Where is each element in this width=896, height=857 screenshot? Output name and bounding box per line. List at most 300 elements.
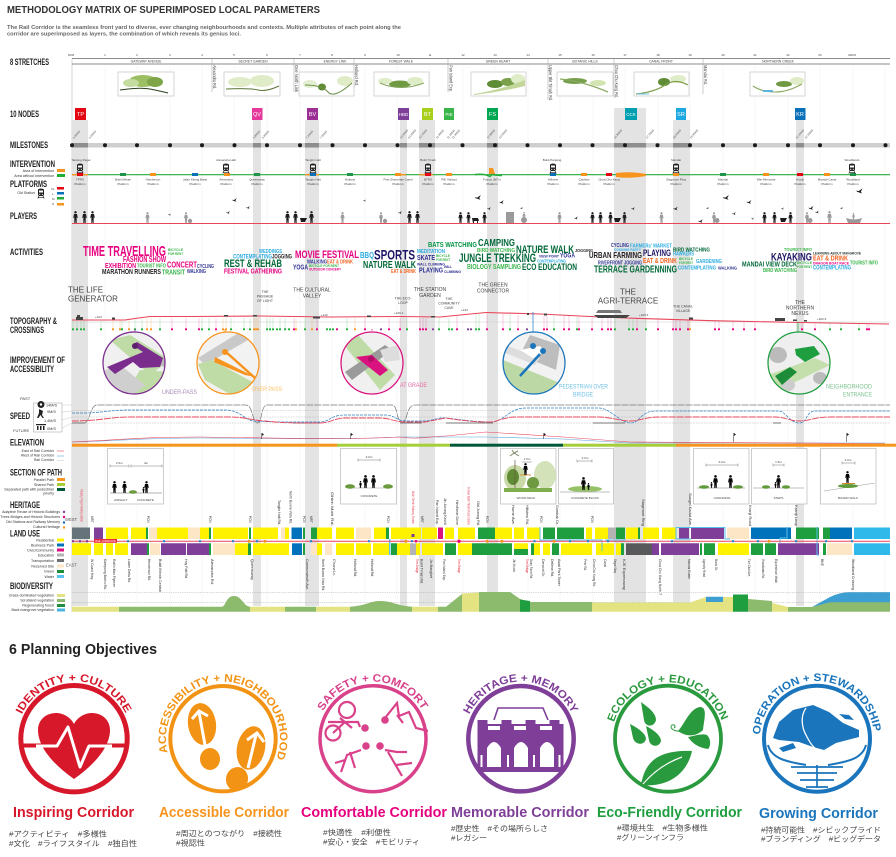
land use legend: Green — [44, 570, 54, 574]
objective: accessible corridor — [158, 674, 289, 848]
platform names: Platform — [794, 182, 806, 186]
place names: GARDEN — [419, 293, 441, 299]
road dividers — [212, 65, 708, 101]
words: canal front: EAT & DRINK — [643, 256, 677, 265]
upper road labels: MRT — [309, 516, 313, 523]
platform names: Platform — [443, 182, 455, 186]
upper road labels: Kranji Loop — [794, 505, 798, 526]
place names: NORTHERN — [786, 306, 815, 312]
node markers: SR — [677, 112, 685, 118]
station names — [71, 158, 860, 162]
tags: #周辺とのつながり #接続性 — [176, 828, 283, 838]
elevation legend: Rail Corridor — [34, 458, 55, 462]
upper road labels: Jln Jurong Kechil — [443, 498, 447, 525]
heading: topography and crossings: TOPOGRAPHY & — [10, 316, 57, 326]
kilometre scale: 17 — [623, 53, 627, 57]
badge: identity and culture — [16, 674, 132, 794]
node markers: BV — [309, 112, 316, 118]
milestone distance labels — [72, 128, 814, 140]
words: green heart: CONTEMPLATING — [537, 258, 566, 263]
stretch names: GREEN HEART — [486, 60, 510, 64]
stretch names: NORTHERN CREEK — [762, 60, 795, 64]
words: forest walk: WALL CLIMBING — [417, 261, 445, 266]
crossing stems — [73, 314, 859, 329]
upper road labels: PCN — [590, 516, 594, 523]
kilometre scale: 11 — [428, 53, 432, 57]
words: gateway avenue: EXHIBITION — [105, 263, 136, 270]
kilometre scale: 23 — [818, 53, 822, 57]
platform names: Platform — [422, 182, 434, 186]
section: steps — [752, 448, 807, 504]
row: land use — [10, 517, 890, 595]
words: energy link: BBQ — [360, 251, 374, 260]
circle: neighbourhood entrance — [768, 332, 830, 394]
station names: Bukit Panjang — [543, 158, 562, 162]
stretch names: ENERGY LINK — [324, 60, 347, 64]
stretch names: FOREST WALK — [389, 60, 414, 64]
platform names: Queensway — [249, 178, 265, 182]
lower road labels: Segar Way — [613, 559, 617, 573]
milestone distance labels: 10.00KM — [399, 128, 409, 140]
lower road labels: Dellene Rd. — [550, 559, 554, 577]
words: energy link: BICYCLE FOR RENT — [309, 264, 340, 268]
section legend: priority — [43, 492, 54, 496]
platform markers — [77, 173, 856, 176]
place names: PASSAGE — [257, 294, 274, 298]
elevation tags: +110 — [321, 313, 328, 317]
words: green heart: BIRD WATCHING — [477, 248, 515, 254]
platform names: Platform — [344, 182, 356, 186]
kilometre scale: 4 — [201, 53, 203, 57]
circle: over-pass — [197, 332, 262, 400]
platform names: Cashew — [579, 178, 590, 182]
land use legend: Transportation — [31, 559, 54, 563]
platform names: Platform — [251, 182, 263, 186]
kilometre scale: 13 — [493, 53, 497, 57]
label: neighbourhood entrance: ENTRANCE — [843, 392, 872, 398]
platforms legend: S — [52, 202, 54, 206]
kilometre scale: 24KM — [848, 53, 856, 57]
milestone distance labels: 0.00KM — [72, 129, 81, 140]
elevation tags: +126.1 — [394, 311, 404, 315]
land use legend: Residential — [36, 538, 54, 542]
section: steps: STEPS — [774, 496, 783, 500]
words: canal front: FARMERs' MARKET — [630, 244, 672, 250]
elevation legend: East of Rail Corridor — [22, 449, 55, 453]
ground line — [72, 222, 890, 224]
milestone band — [72, 143, 890, 148]
objective: comfortable corridor — [301, 674, 447, 846]
road dividers: Mandai Rd. — [703, 65, 708, 85]
label: neighbourhood entrance: NEIGHBORHOOD — [826, 384, 873, 390]
tags: #レガシー — [451, 832, 487, 842]
lower road labels: Canal — [603, 559, 607, 567]
tags: #持続可能性 #シビックプライド — [761, 824, 881, 834]
words: canal front: FOR RENT — [679, 261, 694, 265]
place names: VILLAGE — [676, 309, 691, 313]
lower road labels: Pan Island Exp. — [442, 559, 446, 581]
row: activities word cloud — [10, 238, 878, 276]
objective: memorable corridor — [451, 674, 589, 842]
lower road labels: Tres Bridge — [415, 559, 419, 573]
platform names: Platform — [74, 182, 86, 186]
label: neighbourhood entrance — [826, 384, 873, 398]
direction labels: EAST — [66, 562, 77, 568]
words: green heart: NATURE WALK — [516, 244, 574, 256]
circle: under-pass — [102, 331, 166, 395]
place names: THE ECO- — [395, 296, 412, 300]
road dividers: Alexandra Rd. — [212, 65, 217, 89]
stretch names — [131, 60, 795, 64]
name: comfortable corridor: Comfortable Corridor — [301, 805, 447, 821]
lower road labels: Tres Bridge — [525, 559, 529, 573]
name: growing corridor: Growing Corridor — [759, 806, 878, 822]
speed scale box: 9M/S — [47, 410, 56, 414]
words: gateway avenue: WALKING — [187, 269, 206, 275]
badge: heritage and memory — [463, 674, 579, 794]
lower road labels: Lower Delta Rd. — [127, 559, 131, 583]
badge: operation and stewardship: OPERATION + STEWARDSHIP — [752, 673, 881, 734]
place names: THE STATION — [414, 287, 447, 293]
milestone distance labels: 7.60KM — [319, 129, 328, 140]
lower road labels: Mandai Estate — [687, 559, 691, 579]
place names: NEXUS — [791, 311, 809, 317]
circle: at grade — [341, 332, 403, 394]
badge: heritage and memory: HERITAGE + MEMORY — [463, 674, 579, 714]
platform names: Holland — [345, 178, 355, 182]
upper road labels: PCN — [248, 516, 252, 523]
words: northern creek: TOURIST INFO — [850, 260, 878, 266]
section: steps: 1.5m — [775, 460, 782, 464]
upper road labels: Hindhede Drive — [455, 500, 459, 525]
section: asphalt and concrete — [108, 448, 164, 504]
milestone distance labels: 10.20KM — [407, 128, 417, 140]
intro text — [7, 25, 401, 38]
badge: ecology and education — [607, 674, 728, 794]
land use legend: Education — [38, 554, 54, 558]
tags: #ブランディング #ビッグデータ — [761, 834, 881, 844]
place names: COMMUNITY — [438, 302, 460, 306]
elevation lines — [72, 437, 885, 443]
biodiversity legend — [9, 594, 65, 612]
land use legend: Reserved Site — [31, 564, 54, 568]
words: gateway avenue: CYCLING — [197, 264, 214, 270]
words: northern creek: MANDAI VIEW DECK — [742, 260, 797, 269]
intervention legend — [14, 169, 65, 178]
birds — [168, 188, 863, 223]
lower road labels: Commonwealth Ave. — [305, 559, 309, 590]
speed line: past — [84, 405, 890, 423]
words: northern creek: LEARNING ABOUT MANGROVE — [813, 251, 862, 255]
upper road labels: PCN — [539, 516, 543, 523]
milestone distance labels: 10.70KM — [418, 128, 428, 140]
row: intervention and platforms — [10, 158, 890, 206]
words: energy link: YOGA — [293, 262, 308, 272]
heading: section of path: SECTION OF PATH — [10, 468, 62, 478]
upper road labels: Former Bukit Timah Road Station — [466, 487, 470, 525]
tags — [323, 827, 420, 846]
platform names: Platform — [147, 182, 159, 186]
tags — [617, 822, 709, 842]
lower road labels — [90, 559, 855, 595]
platform names: Choa Chu Kang — [598, 178, 620, 182]
place names: OF LIGHT — [257, 299, 274, 303]
speed scale box: 14M/S — [46, 404, 57, 408]
words: gateway avenue: CONCERT — [167, 260, 198, 270]
row: heritage — [0, 487, 798, 529]
section: concrete 3.0m: CONCRETE — [361, 494, 377, 498]
words: green heart: JOGGING — [575, 248, 593, 253]
platform names: PIE Viaduct — [441, 178, 457, 182]
words: green heart: ECO EDUCATION — [522, 262, 577, 273]
words: green heart: CAMPING — [478, 238, 515, 249]
milestone distance labels: 16.80KM — [613, 128, 623, 140]
words: energy link: MOVIE FESTIVAL — [295, 249, 359, 261]
milestone distance labels: 17.70KM — [645, 128, 655, 140]
bottom land use strip — [72, 539, 890, 555]
place names: LOOP — [398, 301, 409, 305]
lower road labels: Equestrian Walk — [774, 559, 778, 583]
lower road labels: Woodlands Rd. — [761, 559, 765, 579]
platform names: Platform — [307, 182, 319, 186]
platform names: Platform — [392, 182, 404, 186]
biodiversity legend: Regenerating forest — [22, 604, 54, 608]
milestone distance labels: 5.80KM — [252, 129, 261, 140]
section: asphalt and concrete: 4m — [144, 461, 149, 465]
place names: THE — [446, 297, 453, 301]
lower road labels: Petir Rd. — [583, 559, 587, 571]
section: concrete block: CONCRETE BLOCK — [571, 496, 599, 500]
words: canal front: COOKING PARTY — [614, 248, 642, 252]
kilometre scale: 16 — [591, 53, 595, 57]
grey base line — [72, 321, 890, 323]
platform names: Tanglin Halt — [305, 178, 321, 182]
lower road labels: Bank Dr. — [714, 559, 718, 571]
tags: #グリーンインフラ — [617, 832, 684, 842]
direction labels: WEST — [65, 517, 78, 522]
kilometre scale: 7 — [299, 53, 301, 57]
words: northern creek — [742, 247, 878, 274]
tags — [451, 823, 548, 842]
words: canal front: CONTEMPLATING — [678, 266, 716, 272]
section: board walk — [820, 448, 876, 504]
kilometre scale: 15 — [558, 53, 562, 57]
section legend — [4, 478, 65, 496]
platform names: Platform — [117, 182, 129, 186]
words: secret garden: JOGGING — [272, 254, 292, 260]
upper road labels: PCN — [485, 516, 489, 523]
canal front intervention area — [616, 172, 646, 178]
station names: Tanjong Pagar — [71, 158, 91, 162]
place names: THE LIFE — [68, 286, 103, 295]
place names: AGRI-TERRACE — [598, 296, 658, 306]
heading: activities: ACTIVITIES — [10, 247, 43, 257]
words: northern creek: BIRD WATCHING — [763, 268, 797, 274]
intro text: The Rail Corridor is the seamless front yard to diverse, ever changing neighbourhoods and contexts. Multiple attributes of each point along the — [7, 25, 401, 31]
place names — [68, 282, 815, 317]
section: concrete 6.0m: CONCRETE — [714, 496, 730, 500]
kilometre scale: 19 — [688, 53, 692, 57]
place names: THE CANAL — [673, 304, 693, 308]
name: eco-friendly corridor: Eco-Friendly Corridor — [597, 805, 742, 821]
topography line — [72, 312, 889, 324]
words: forest walk: FOR RENT — [436, 258, 450, 262]
platform names: Hillview — [548, 178, 559, 182]
place names: GENERATOR — [68, 295, 118, 304]
platforms legend — [17, 187, 64, 206]
central corridor line — [72, 540, 890, 542]
words: green heart: YOGA — [560, 253, 575, 260]
platforms legend: M — [52, 197, 55, 201]
row: speed — [10, 396, 890, 433]
words: canal front: URBAN FARMING — [589, 250, 642, 260]
elevation tags: +102.9 — [817, 317, 827, 321]
words: forest walk: SKATE — [417, 255, 435, 262]
node markers: CCK — [626, 112, 636, 117]
place names: THE — [262, 290, 269, 294]
kilometre scale: 21 — [753, 53, 757, 57]
words: secret garden — [224, 249, 292, 276]
topography structures — [76, 310, 807, 322]
words: canal front: TERRACE GARDENNING — [594, 265, 677, 276]
road dividers: One North Link — [294, 65, 299, 93]
fusion platform shape — [475, 168, 502, 176]
platform names: Platform — [189, 182, 201, 186]
row: improvement of accessibility — [10, 312, 873, 405]
platform names: Mandai Canal — [818, 178, 837, 182]
biodiversity reference lines — [72, 592, 890, 602]
lower road labels: Agrocity Road — [702, 559, 706, 577]
objective: growing corridor — [752, 673, 881, 844]
lower road labels: Queensway — [250, 559, 254, 580]
heritage legend: Trees Bridges and Historic Structures — [0, 515, 60, 519]
path type bar — [72, 444, 896, 447]
platform names: TPRS — [76, 178, 84, 182]
words: gateway avenue: TOURIST INFO — [137, 264, 166, 270]
lower road labels: Holland Rd. — [370, 559, 374, 577]
place names: CONNECTOR — [477, 288, 509, 294]
upper road labels — [80, 487, 798, 526]
place names: THE GREEN — [478, 282, 508, 288]
upper road labels: PCN — [208, 516, 212, 523]
heading: land use: LAND USE — [10, 529, 40, 539]
kilometre scale: 3 — [169, 53, 171, 57]
objective: inspiring corridor — [9, 674, 138, 848]
section legend: Parallel Path — [34, 478, 54, 482]
words: gateway avenue: TIME TRAVELLING — [83, 243, 166, 260]
platform names: First Sherndale Canal — [383, 178, 413, 182]
section: wood deck — [500, 448, 556, 504]
badge: accessibility and neighbourhood: ACCESSIBILITY + NEIGHBOURHOOD — [158, 674, 288, 760]
tags — [176, 828, 283, 848]
upper road labels: Tanjong Pagar Railway Station — [80, 489, 84, 522]
section: concrete 3.0m: 3.0m — [366, 455, 373, 459]
lower road labels: Woodland Crossing — [851, 559, 855, 590]
tags — [761, 824, 881, 844]
platform names: Platform — [717, 182, 729, 186]
milestone distance labels: 12.80KM — [486, 128, 496, 140]
upper road labels: Old Jurong Rd. — [476, 501, 480, 526]
row: elevation — [10, 432, 896, 462]
words: gateway avenue: BICYCLE — [168, 248, 184, 252]
platforms legend: L — [52, 192, 54, 196]
kilometre scale: 22 — [786, 53, 790, 57]
heading: platforms: PLATFORMS — [10, 179, 47, 189]
platform names: Jalan Kilang Barat — [183, 178, 207, 182]
water channel outline — [540, 527, 819, 555]
top land use strip — [72, 528, 890, 539]
platform names: Kranji — [796, 178, 804, 182]
section: wood deck: 1.5m — [524, 457, 531, 461]
words: canal front: CYCLING — [611, 243, 629, 249]
label: pedestrian over bridge: PEDESTRIAN OVER — [559, 384, 609, 390]
lower road labels: Turf Club Ave. — [747, 559, 751, 577]
tags — [9, 828, 138, 848]
platform names: Platform — [670, 182, 682, 186]
words: canal front: RIVERFRONT JOGGING — [598, 260, 642, 266]
speed scale box: PAST — [20, 396, 31, 401]
words: forest walk: WALL — [444, 265, 453, 269]
direction labels — [65, 517, 78, 568]
platform names: Platform — [760, 182, 772, 186]
row: 10 nodes — [10, 108, 806, 120]
platform names: Platform — [603, 182, 615, 186]
words: northern creek: FOR RENT — [797, 265, 812, 269]
kilometre scale: 18 — [656, 53, 660, 57]
row: 8 stretches — [10, 53, 890, 101]
lower road labels: KJE Expressway — [622, 559, 626, 591]
upper road labels: Pan Island Exp. — [435, 500, 439, 525]
upper road labels: Hillview Rd. — [525, 505, 529, 525]
speed scale box: 1.4M/S — [44, 419, 56, 423]
section legend: Shared Path — [34, 483, 54, 487]
kilometre scale: 9 — [364, 53, 366, 57]
node markers: TP — [77, 112, 84, 118]
row: section of path — [4, 448, 876, 504]
circle: pedestrian over bridge — [503, 332, 565, 400]
words: green heart: BIOLOGY SAMPLING — [467, 264, 521, 271]
station names: Mandai — [671, 158, 681, 162]
intervention legend: Area of Intervention — [23, 169, 54, 173]
lower road labels: Holland Rd. — [353, 559, 357, 577]
speed line: east — [72, 417, 890, 423]
badge: operation and stewardship — [752, 673, 881, 794]
section: concrete 6.0m — [694, 448, 749, 504]
words: gateway avenue: TRANSIT — [162, 270, 186, 276]
heritage legend: Adaptive Reuse of Historic Buildings — [2, 510, 60, 514]
upper road labels: MRT — [420, 516, 424, 523]
lower road labels: Asad Park Tower — [557, 559, 561, 587]
words: green heart: JUNGLE TREKKING — [459, 251, 536, 265]
words: forest walk — [363, 242, 477, 275]
upper road labels: Gombak Dr. — [555, 505, 559, 525]
grey walkers and wheelchairs — [145, 211, 862, 223]
lower road labels: C'Isana Ln. — [332, 559, 336, 576]
words: secret garden: CONTEMPLATING — [233, 254, 272, 260]
upper road labels: Tanglin Halt Rd. — [277, 500, 281, 525]
words: green heart — [459, 238, 593, 273]
node markers: PIE — [445, 112, 453, 117]
lower road labels: Bukit Timah Rd. — [420, 559, 424, 584]
stretch names: CANAL FRONT — [649, 60, 673, 64]
kilometre scale: 0KM — [68, 53, 75, 57]
upper road labels: MRT — [90, 516, 94, 523]
section: asphalt and concrete: CONCRETE — [137, 498, 154, 502]
land use legend: Civic/Community — [27, 548, 54, 552]
words: gateway avenue: FASHION SHOW — [123, 255, 166, 264]
kilometre scale: 5 — [233, 53, 235, 57]
tags: #環境共生 #生物多様性 — [617, 822, 709, 832]
